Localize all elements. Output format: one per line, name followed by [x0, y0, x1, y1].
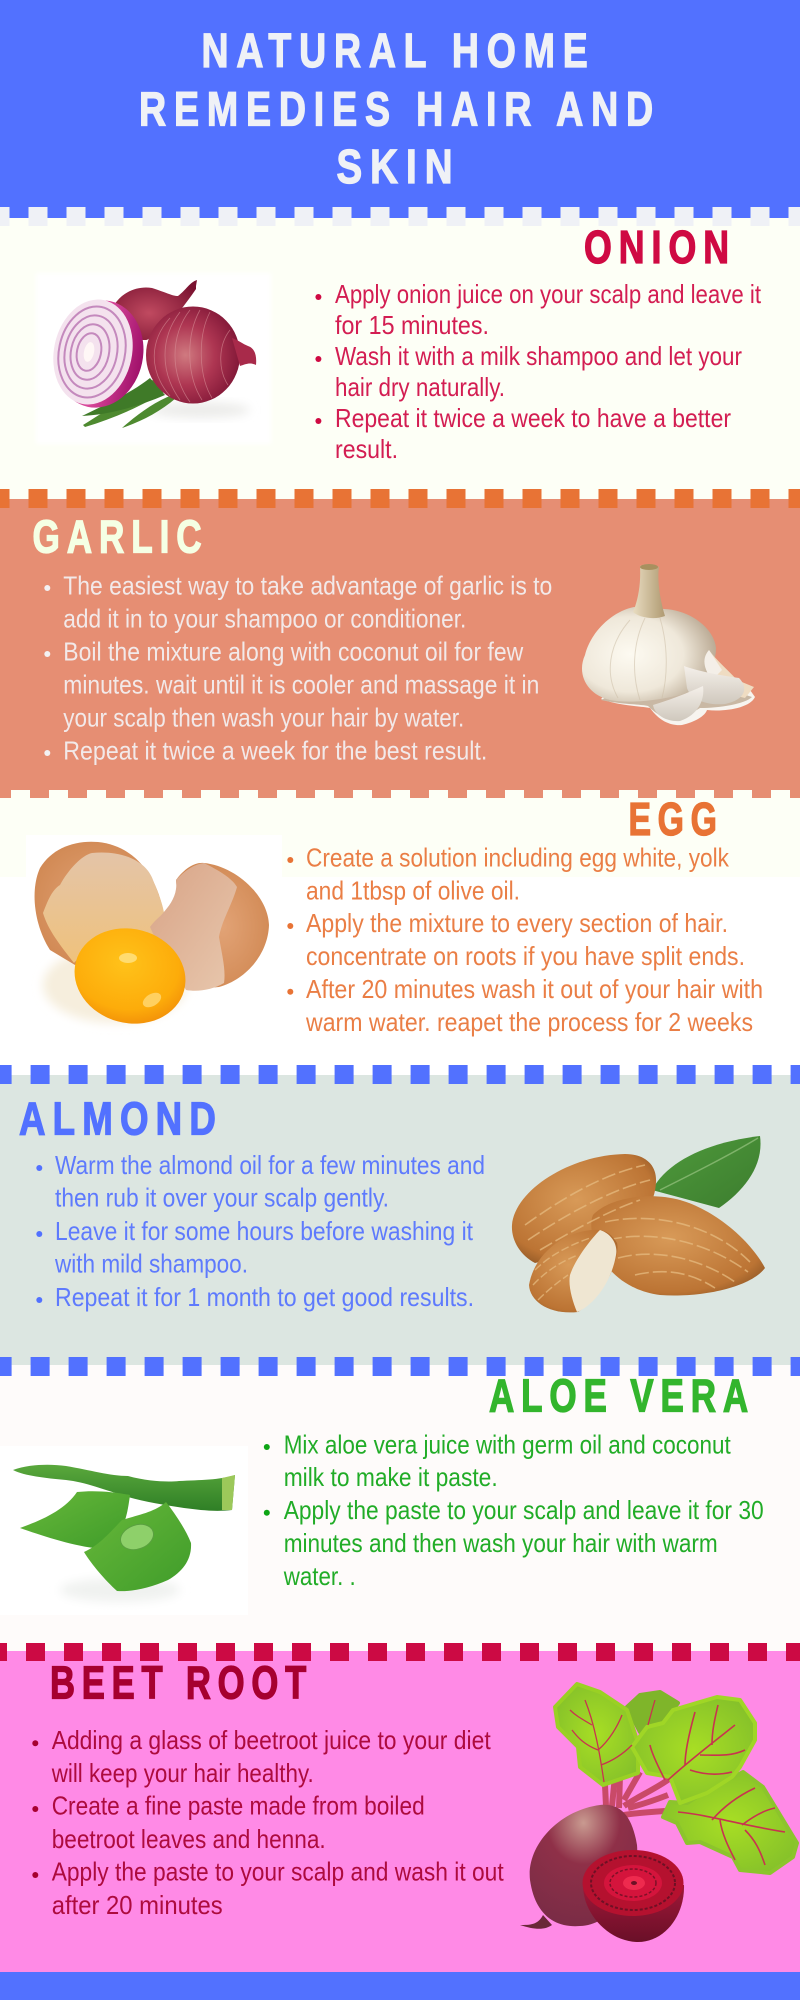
list: aloe vera tips: minutes and then wash your hair with warm [284, 1528, 718, 1558]
heading: egg: EGG [628, 793, 724, 845]
icon: beetroot [520, 1684, 797, 1942]
list: beet root tips [32, 1725, 504, 1920]
panel: garlic [0, 489, 800, 798]
heading: almond: ALMOND [19, 1092, 223, 1144]
list: almond tips: Leave it for some hours before washing it [55, 1216, 474, 1246]
list: onion tips: Repeat it twice a week to have a better [335, 403, 731, 433]
panel: aloe vera [0, 1357, 800, 1651]
list: garlic tips: The easiest way to take advantage of garlic is to [63, 571, 552, 601]
list: onion tips [315, 279, 762, 464]
list: garlic tips: Repeat it twice a week for the best result. [63, 735, 487, 765]
list: egg tips: concentrate on roots if you have split ends. [306, 941, 745, 971]
list: garlic tips [44, 571, 552, 765]
list: beet root tips: Apply the paste to your scalp and wash it out [52, 1857, 504, 1887]
list: garlic tips: Boil the mixture along with coconut oil for few [63, 636, 523, 666]
list: almond tips [36, 1150, 485, 1312]
list: garlic tips: your scalp then wash your hair by water. [63, 702, 464, 732]
list: beet root tips: Adding a glass of beetroot juice to your diet [52, 1725, 491, 1755]
list: beet root tips: after 20 minutes [52, 1890, 223, 1920]
list: aloe vera tips [264, 1429, 764, 1591]
list: garlic tips: minutes. wait until it is cooler and massage it in [63, 669, 539, 699]
list: almond tips: Repeat it for 1 month to get good results. [55, 1282, 474, 1312]
header panel [0, 0, 800, 218]
list: onion tips: result. [335, 434, 398, 464]
list: beet root tips: beetroot leaves and henna. [52, 1824, 326, 1854]
footer band [0, 1972, 800, 2000]
list: garlic tips: add it in to your shampoo or conditioner. [63, 603, 466, 633]
list: beet root tips: Create a fine paste made from boiled [52, 1791, 425, 1821]
list: egg tips: warm water. reapet the process for 2 weeks [305, 1007, 753, 1037]
list: beet root tips: will keep your hair healthy. [51, 1758, 314, 1788]
panel: beet root [0, 1643, 800, 1972]
list: onion tips: hair dry naturally. [335, 372, 505, 402]
icon: almonds and leaf [512, 1136, 765, 1312]
heading: onion: ONION [584, 221, 736, 273]
list: almond tips: Warm the almond oil for a few minutes and [55, 1150, 485, 1180]
list: egg tips: Apply the mixture to every section of hair. [306, 908, 728, 938]
panel: almond [0, 1065, 800, 1365]
list: almond tips: with mild shampoo. [54, 1249, 248, 1279]
list: egg tips: Create a solution including egg white, yolk [306, 843, 730, 873]
list: onion tips: Wash it with a milk shampoo and let your [335, 341, 742, 371]
list: aloe vera tips: milk to make it paste. [284, 1462, 498, 1492]
title: NATURAL HOME [202, 25, 596, 78]
heading: garlic: GARLIC [32, 510, 208, 562]
list: onion tips: for 15 minutes. [335, 310, 489, 340]
title: SKIN [336, 141, 460, 194]
icon: cracked egg [26, 835, 282, 1036]
panel: egg [0, 790, 800, 1075]
list: egg tips: and 1tbsp of olive oil. [306, 875, 520, 905]
icon: aloe vera pieces [0, 1446, 248, 1615]
title [139, 25, 661, 194]
list: almond tips: then rub it over your scalp gently. [55, 1183, 389, 1213]
icon: garlic bulb [582, 564, 755, 725]
list: aloe vera tips: water. . [283, 1561, 356, 1591]
title: REMEDIES HAIR AND [139, 84, 661, 136]
heading: beet root: BEET ROOT [50, 1656, 313, 1708]
panel: onion [0, 207, 800, 499]
list: egg tips [287, 843, 763, 1037]
list: aloe vera tips: Mix aloe vera juice with germ oil and coconut [284, 1429, 731, 1459]
icon: red onions [36, 273, 271, 444]
